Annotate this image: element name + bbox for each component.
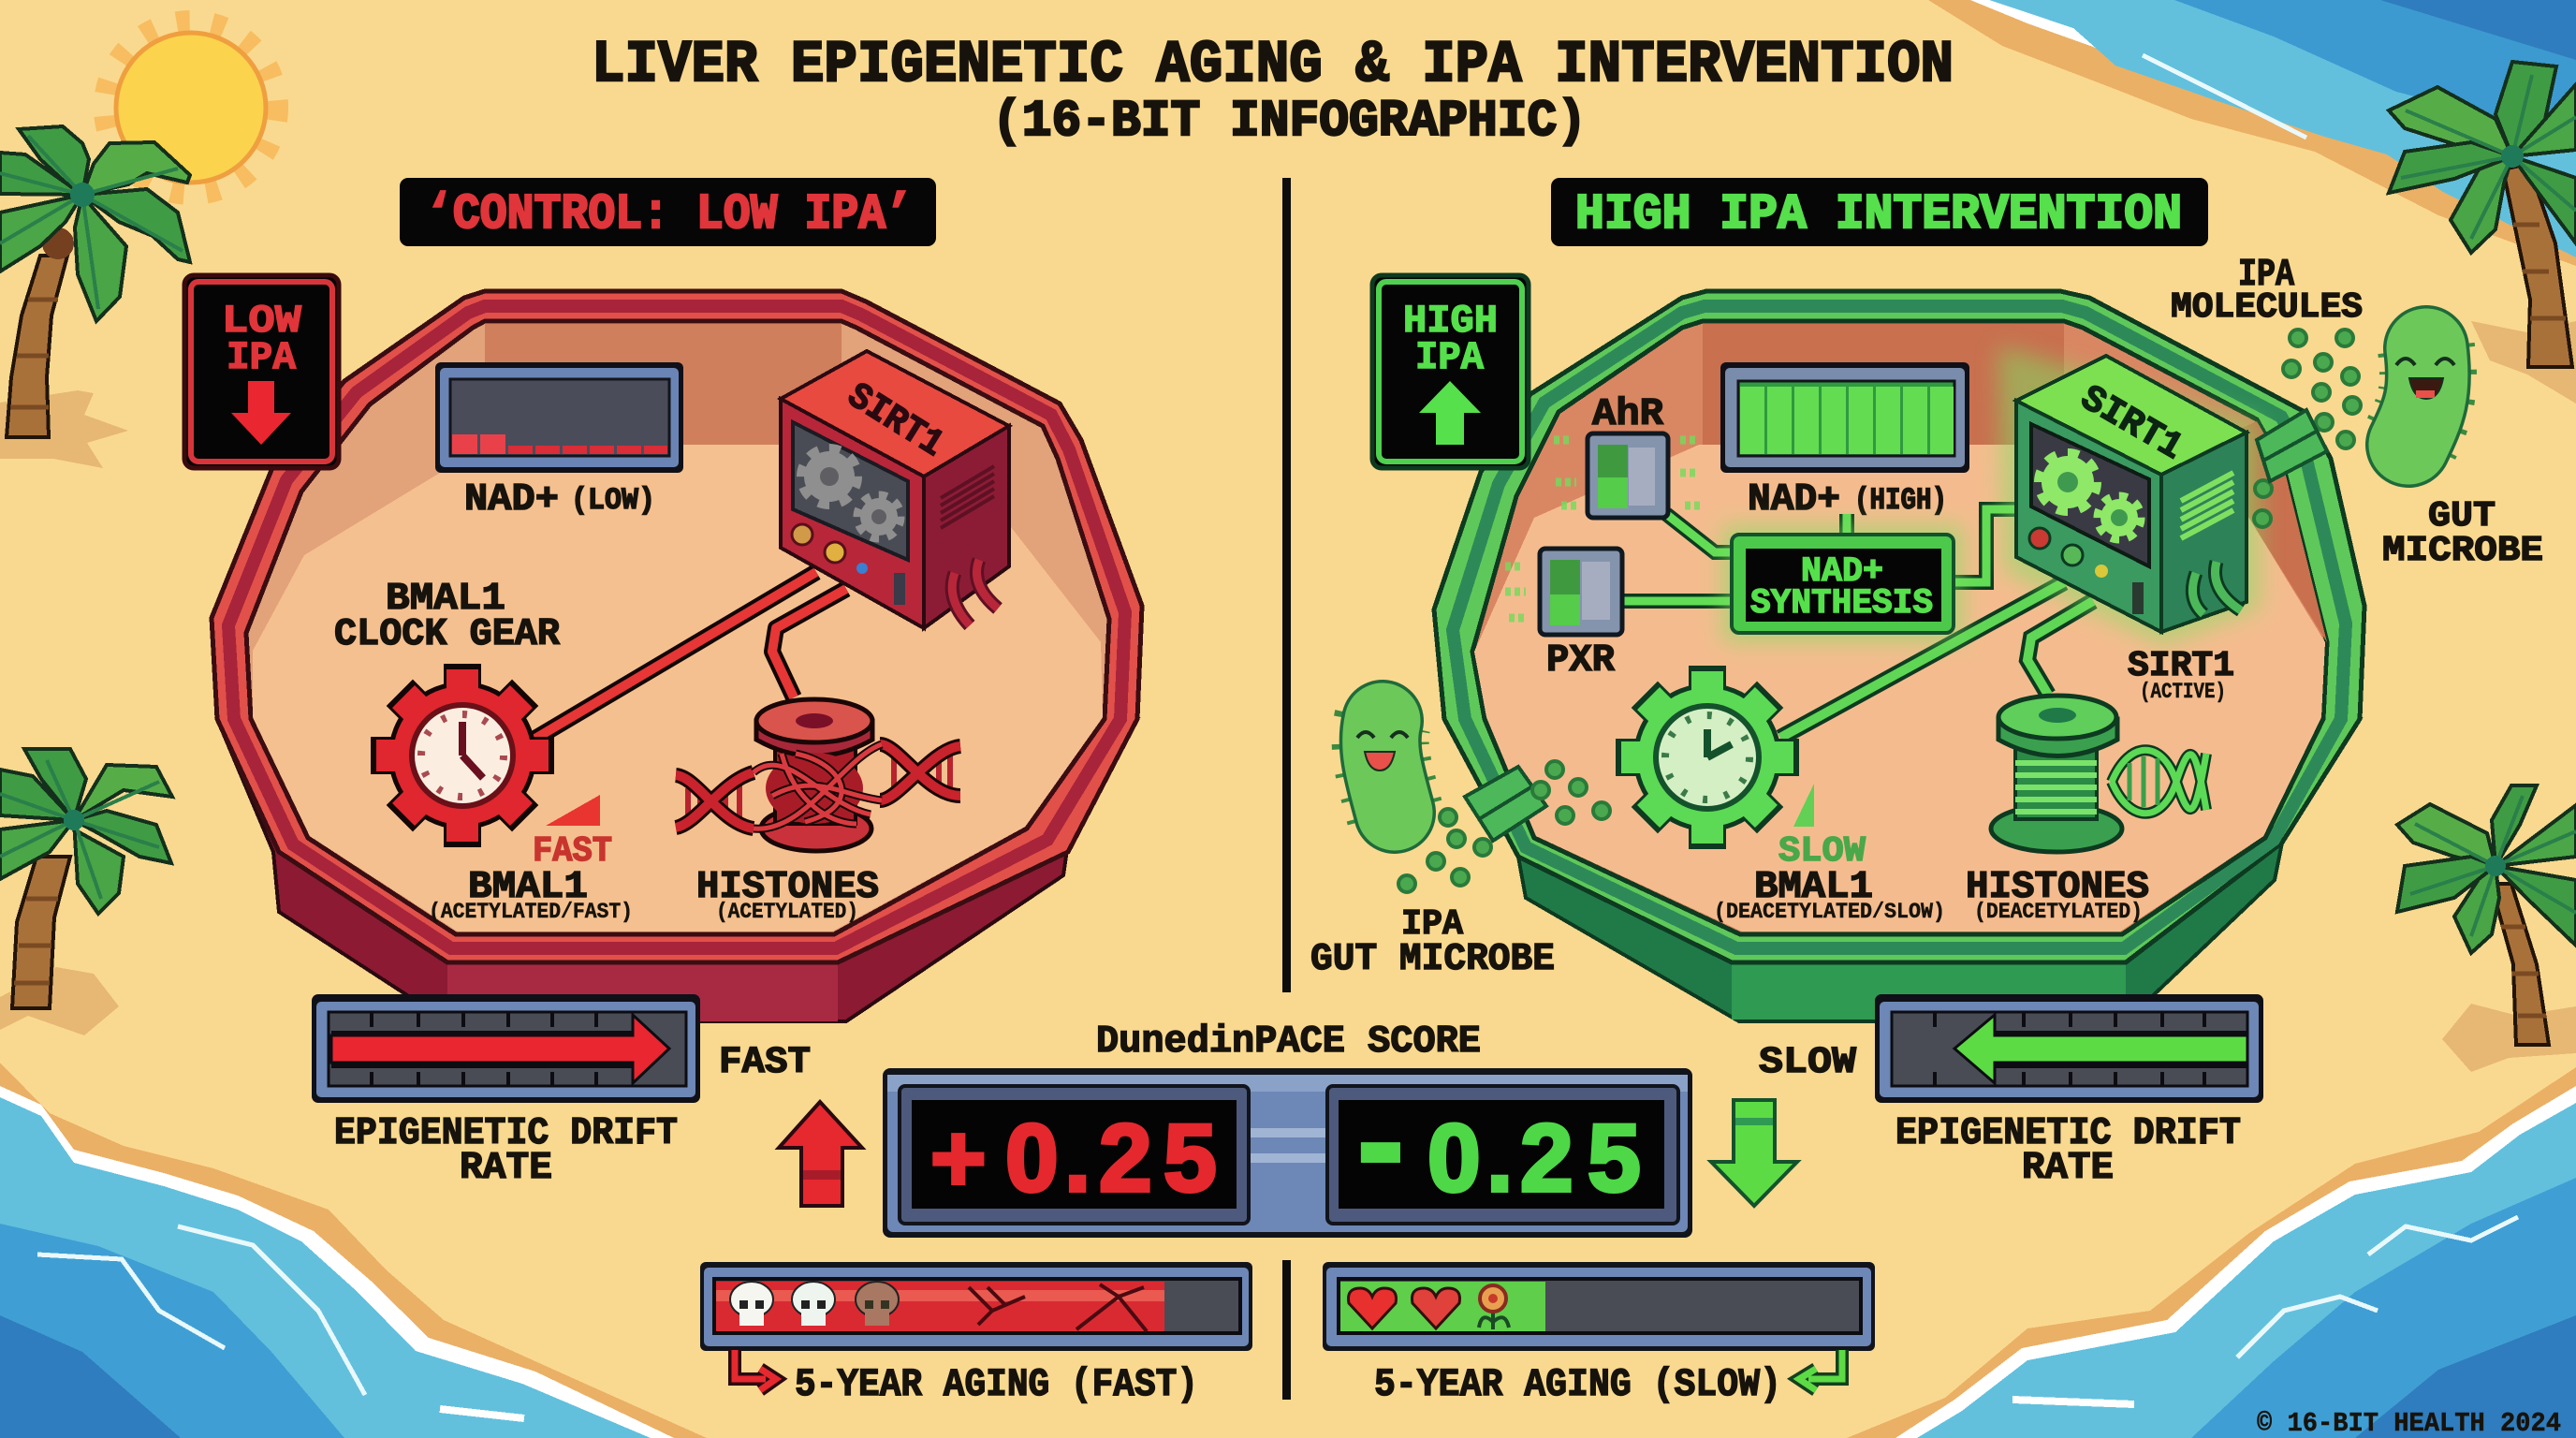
gauge: NAD+ low [435,362,683,473]
label: epigenetic drift rate right: RATE [2022,1147,2114,1190]
label: histones acetylated: (ACETYLATED) [716,900,858,924]
icon: histones spool with DNA [1991,696,2206,852]
icon: histones tangled [676,699,960,851]
label: gut microbe upper right [2382,496,2543,571]
score display: intervention -0.25 [1327,1062,1678,1224]
heading: control low IPA: ‘CONTROL: LOW IPA’ [426,186,913,242]
label: epigenetic drift rate left [334,1112,678,1190]
label: 5-year aging fast: 5-YEAR AGING (FAST) [795,1362,1198,1407]
icon: SIRT1 machine control: SIRT1 [840,375,950,467]
icon: membrane channel lower left [1465,767,1546,841]
ocean: top right [1928,0,2576,266]
panel: DunedinPACE score display [883,1062,1692,1238]
title: LIVER EPIGENETIC AGING & IPA INTERVENTION [592,32,1954,98]
label: NAD+ high [1748,478,1947,521]
label: IPA gut microbe: GUT MICROBE [1310,938,1555,981]
score display: intervention -0.25: - [1357,1062,1404,1219]
arrow: aging fast [735,1350,776,1390]
label: BMAL1 acetylated: (ACETYLATED/FAST) [429,900,633,924]
icon: AhR switch [1554,433,1702,518]
label: IPA molecules: IPA [2238,254,2294,297]
label: NAD+ low: (LOW) [571,483,655,518]
icon: low IPA sign: LOW [222,299,302,344]
label: IPA gut microbe [1310,904,1555,981]
label: BMAL1 deacetylated [1714,866,1945,924]
label: NAD+ high: NAD+ [1748,478,1840,521]
icon: low IPA sign: IPA [227,335,297,380]
icon: SIRT1 machine active: SIRT1 [2072,378,2189,470]
icon: sun [105,22,277,194]
icon: skull 3 [856,1282,899,1326]
octagon wall [1444,719,2360,1021]
label: histones deacetylated: (DEACETYLATED) [1974,900,2143,924]
icon: low IPA sign [184,275,339,468]
gauge: NAD+ high [1720,362,1969,473]
label: fast drift: FAST [719,1042,811,1084]
octagon wall [217,719,1137,1021]
octagon rim [1434,291,2364,962]
icon: SIRT1 machine active [1998,346,2261,646]
label: IPA molecules: MOLECULES [2171,287,2363,328]
label: IPA gut microbe: IPA [1401,904,1463,945]
icon: up arrow [779,1102,862,1206]
icon: gut microbe lower left [1357,721,1408,813]
panel: control liver octagon [212,291,1142,1021]
icon: high IPA sign [1372,275,1529,468]
NAD+ synthesis box: NAD+ [1801,552,1883,592]
label: SIRT1 active [2128,646,2234,704]
icon: BMAL1 clock gear active [1618,668,1796,846]
label: BMAL1 deacetylated: BMAL1 [1754,866,1873,909]
label: slow drift: SLOW [1759,1042,1856,1084]
score display: control +0.25: +0.25 [930,1105,1217,1211]
label: epigenetic drift rate left: EPIGENETIC DRIFT [334,1112,678,1155]
label: SIRT1 active: (ACTIVE) [2140,680,2226,704]
ocean: bottom right [1847,1067,2576,1438]
connector lines: SIRT1 to BMAL1 and histones [534,572,846,740]
palm tree: top left [0,126,190,468]
label: BMAL1 clock gear: BMAL1 [386,578,505,621]
octagon floor [253,445,1103,932]
panel: epigenetic drift fast [312,994,700,1103]
label: BMAL1 acetylated [429,866,633,924]
IPA molecule dots: lower left [1398,761,1610,892]
panel: high IPA liver octagon [1434,291,2364,1021]
subtitle: (16-BIT INFOGRAPHIC) [992,92,1587,151]
label: epigenetic drift rate right [1895,1112,2241,1190]
NAD+ synthesis box: SYNTHESIS [1750,584,1933,624]
icon: fast triangle [546,795,600,826]
label: NAD+ high: (HIGH) [1854,483,1947,518]
label: PXR: PXR [1546,639,1615,682]
icon: skull 2 [792,1282,835,1326]
label: 5-year aging slow: 5-YEAR AGING (SLOW) [1374,1362,1781,1407]
label: SIRT1 active: SIRT1 [2128,646,2234,686]
ocean: bottom left [0,1063,707,1438]
label: BMAL1 clock gear [334,578,560,656]
icon: gut microbe upper right [2396,348,2454,445]
panel: 5-year aging bar fast [700,1262,1252,1351]
label: epigenetic drift rate right: EPIGENETIC DRIFT [1895,1112,2241,1155]
icon: PXR switch [1505,549,1622,635]
label: fast: FAST [533,831,612,872]
icon: flower [1479,1285,1509,1329]
icon: down arrow [1711,1100,1797,1206]
icon: membrane channel upper right [2257,410,2327,481]
label: slow: SLOW [1778,831,1866,872]
label: histones acetylated: HISTONES [696,866,879,909]
label: IPA molecules [2171,254,2363,328]
heading: high IPA intervention: HIGH IPA INTERVENTION [1575,186,2182,242]
IPA molecule dots: upper right [2254,330,2361,527]
icon: heart 1 [1348,1288,1397,1328]
icon: skull 1 [730,1282,773,1326]
icon: slow triangle [1793,784,1814,827]
score display: control +0.25 [900,1086,1249,1224]
icon: high IPA sign: HIGH [1403,299,1498,344]
label: gut microbe upper right: GUT [2428,496,2496,536]
heading: DunedinPACE score: DunedinPACE SCORE [1096,1020,1481,1064]
score display: intervention -0.25: 0.25 [1427,1105,1641,1211]
icon: high IPA sign: IPA [1415,335,1485,380]
panel: epigenetic drift slow [1875,994,2263,1103]
label: NAD+ low [464,478,655,521]
central divider [1282,178,1291,992]
label: BMAL1 acetylated: BMAL1 [468,866,588,909]
label: histones deacetylated: HISTONES [1966,866,2149,909]
label: NAD+ low: NAD+ [464,478,559,521]
label: epigenetic drift rate left: RATE [460,1147,552,1190]
label: BMAL1 deacetylated: (DEACETYLATED/SLOW) [1714,900,1945,924]
icon: SIRT1 machine control [781,351,1009,628]
NAD+ synthesis box [1722,525,1963,642]
label: AhR: AhR [1592,393,1663,436]
label: gut microbe upper right: MICROBE [2382,531,2543,571]
icon: heart 2 [1412,1288,1460,1328]
label: BMAL1 clock gear: CLOCK GEAR [334,613,560,656]
octagon rim [212,291,1142,962]
lower central divider [1282,1260,1291,1400]
palm tree: lower left [0,749,172,1035]
palm tree: lower right [2397,785,2576,1072]
palm tree: top right [2389,62,2576,404]
connectors: receptors to NAD+ synthesis to SIRT1 [1622,509,2093,738]
octagon floor [1474,445,2325,932]
icon: BMAL1 clock gear control [373,667,551,844]
arrow: aging slow [1799,1350,1842,1390]
panel: 5-year aging bar slow [1323,1262,1875,1351]
